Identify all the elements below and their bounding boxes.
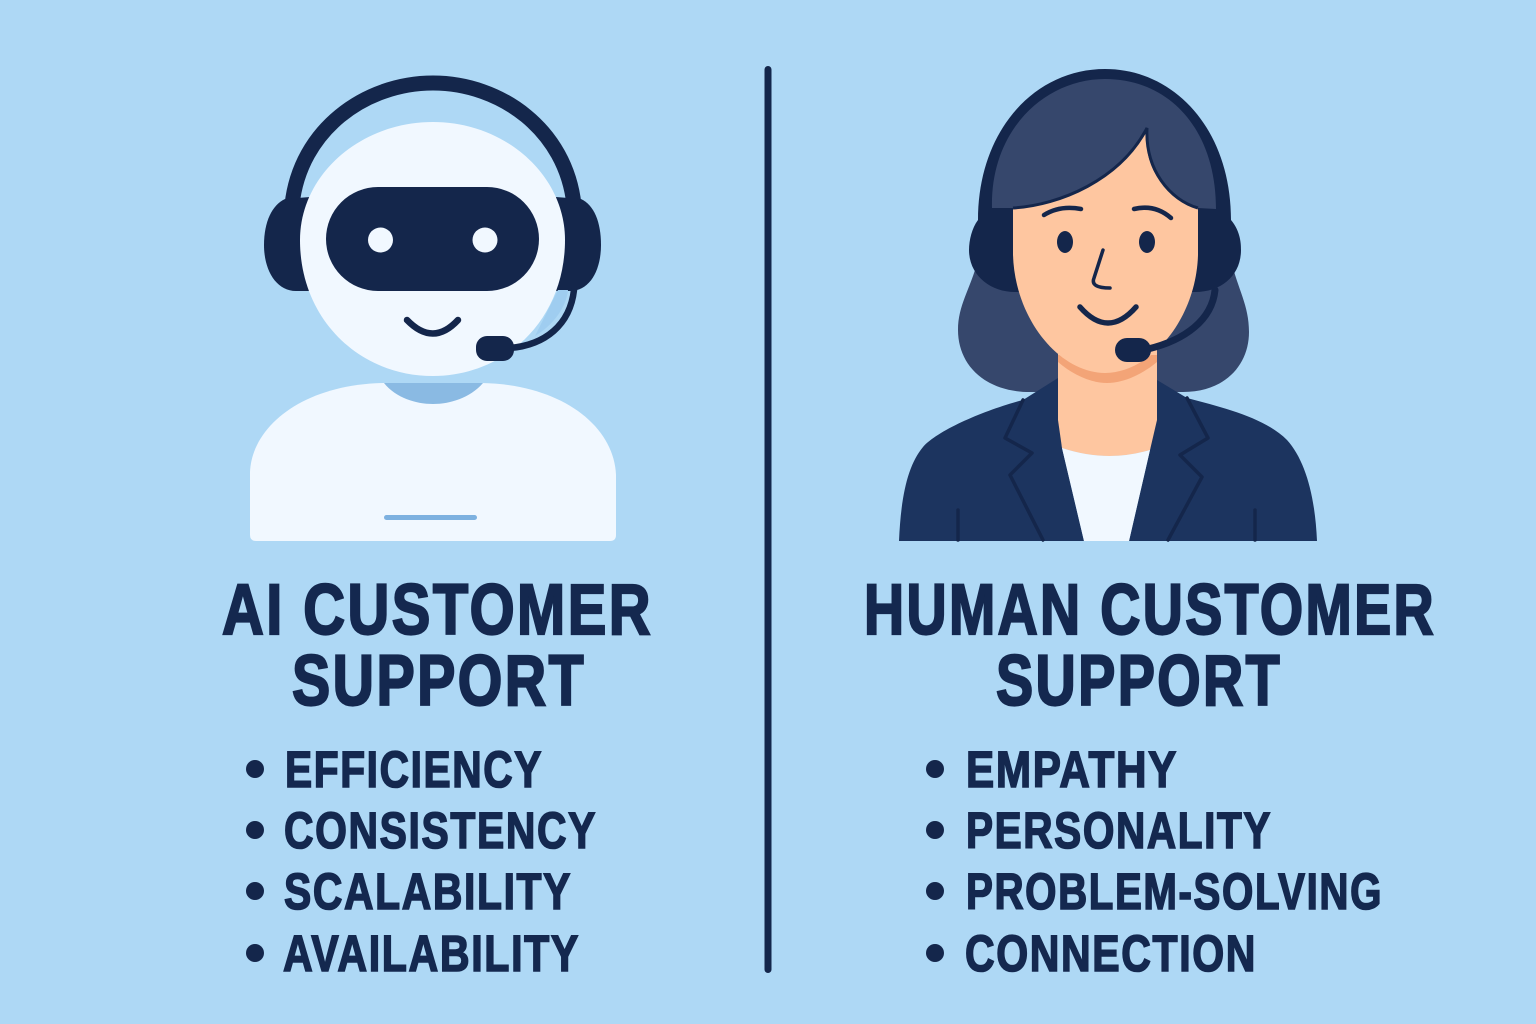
right eye [1139,231,1155,253]
icon: woman agent with headset [899,69,1317,541]
central divider [764,66,772,973]
fringe outline [1013,128,1198,208]
right eye [472,228,498,252]
list: human strengths: PERSONALITY [966,802,1272,859]
jacket [899,378,1317,541]
microphone [1115,338,1151,362]
neck shadow [1058,355,1157,383]
left ear cup [264,197,310,291]
fringe hair [992,79,1216,209]
heading: AI customer support [222,571,653,721]
heading: human customer support [864,571,1436,721]
microphone boom [510,290,574,348]
chest bar [384,515,477,520]
nose [1093,250,1110,288]
microphone [476,336,514,361]
heading: AI customer support: AI CUSTOMER [222,571,653,650]
face [1013,125,1198,373]
jacket lapels and seams [958,398,1255,540]
smile [407,320,458,334]
back hair [958,260,1249,392]
robot head [300,122,565,376]
right ear cup [556,197,601,291]
list: human strengths [926,741,1383,982]
list: AI strengths: SCALABILITY [284,863,572,920]
list: human strengths: CONNECTION [965,925,1257,982]
robot neck [384,383,483,404]
head shadow crescent [535,290,568,336]
list: human strengths: EMPATHY [966,741,1178,798]
eyebrows [1044,208,1171,218]
list: human strengths: PROBLEM-SOLVING [966,863,1383,920]
list: AI strengths: EFFICIENCY [285,741,543,798]
heading: human customer support: SUPPORT [996,642,1282,721]
icon: robot agent with headset [250,83,616,541]
list: AI strengths: AVAILABILITY [283,925,580,982]
headset band [292,83,574,205]
list: AI strengths: CONSISTENCY [284,802,597,859]
neck [1058,345,1157,456]
smile [1080,307,1136,323]
microphone boom [1148,290,1215,349]
visor [326,187,539,291]
left eye [368,228,393,252]
panel: human customer support [864,69,1436,982]
left eye [1057,231,1073,253]
panel: AI customer support [222,83,653,982]
robot body [250,383,616,541]
headset band and cups [969,69,1241,292]
heading: AI customer support: SUPPORT [292,642,586,721]
list: AI strengths [246,741,597,982]
white shirt [1062,448,1150,541]
